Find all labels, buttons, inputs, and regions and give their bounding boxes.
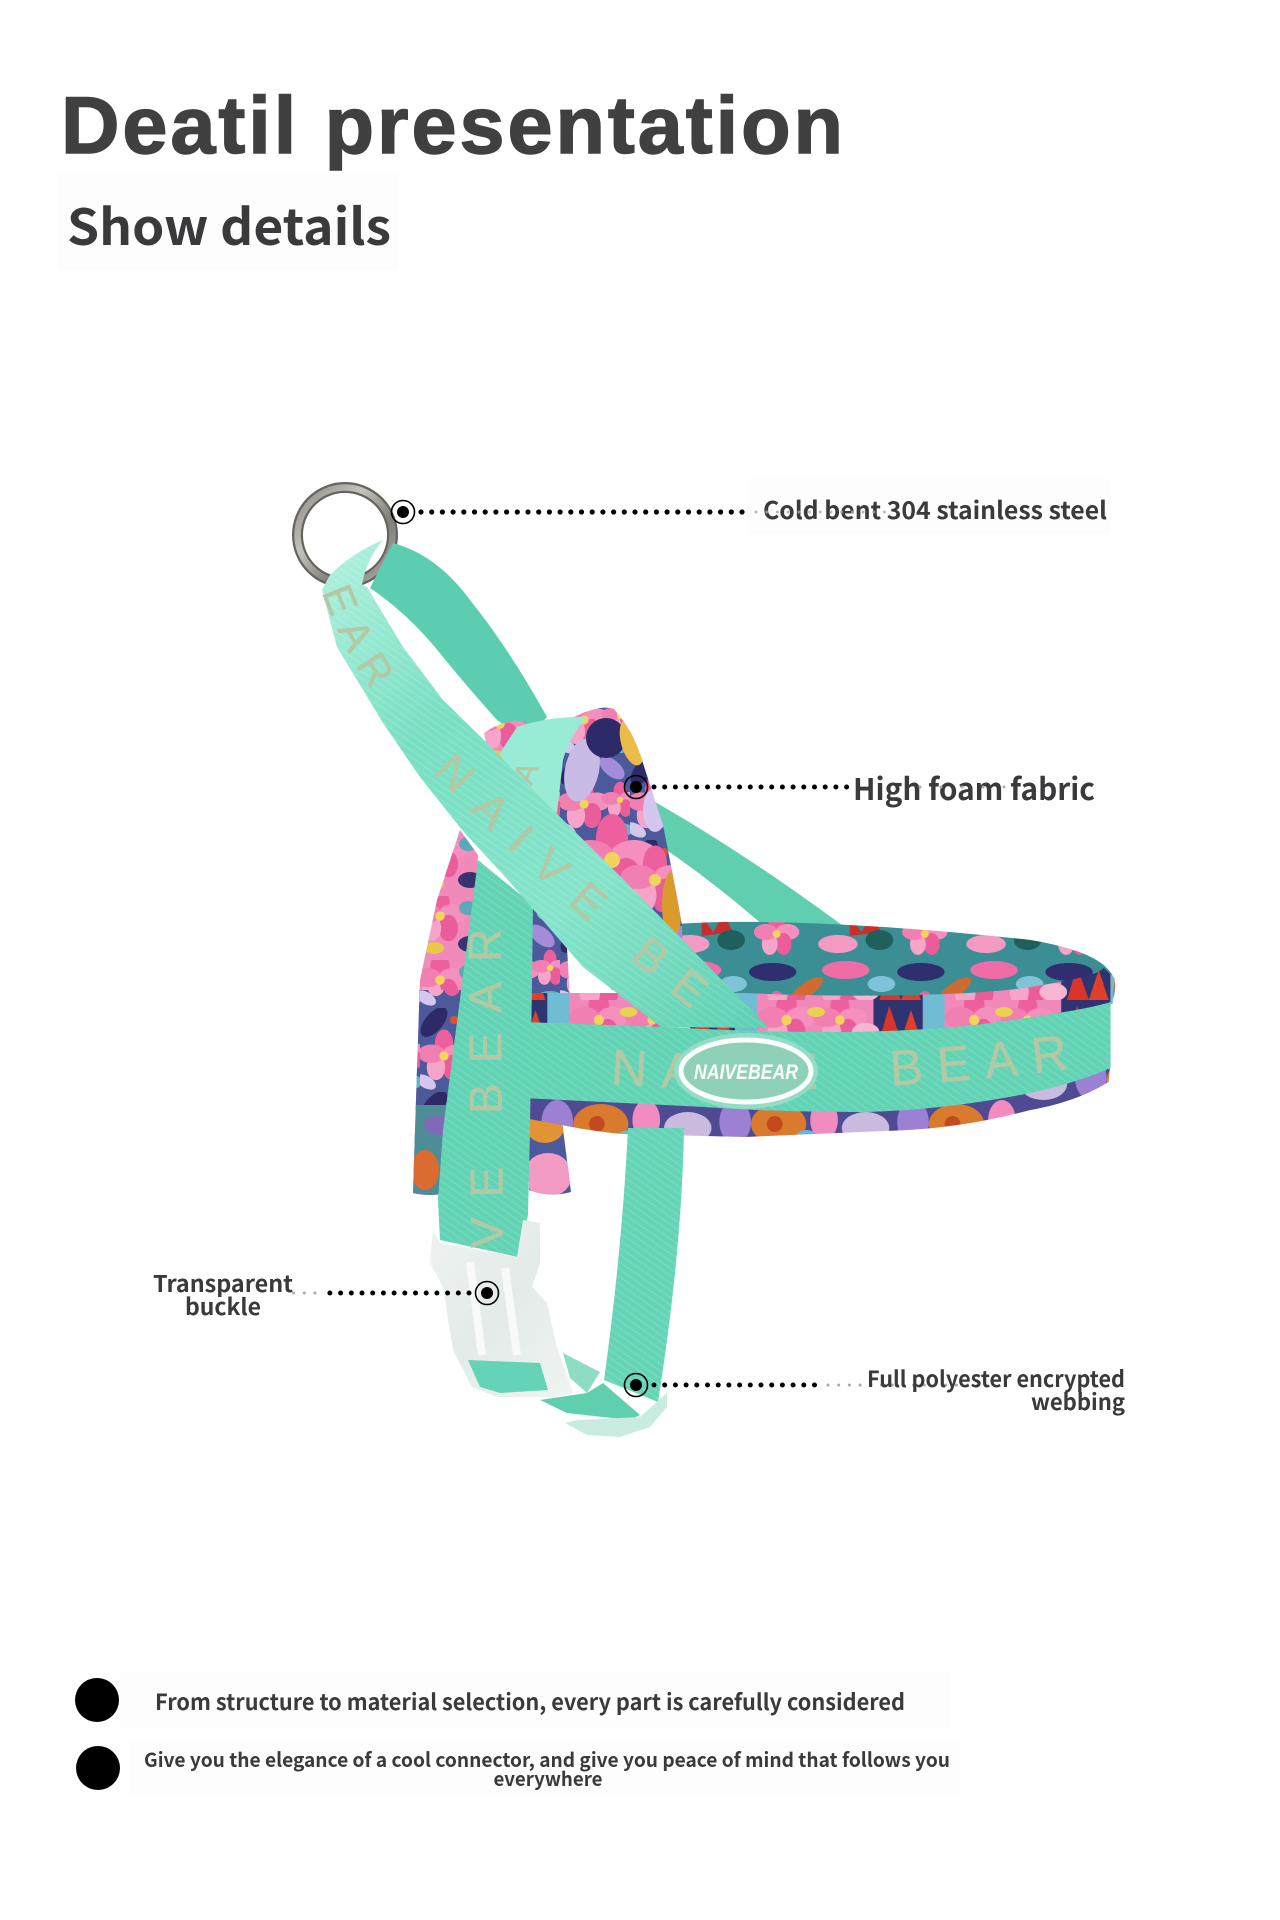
- logo badge: NAIVEBEAR: [694, 1061, 799, 1084]
- collar floral rim: [525, 968, 1115, 1036]
- callout: high foam fabric: [624, 765, 1095, 809]
- clear plastic buckle: [430, 1220, 667, 1437]
- woven brand text on collar: NAIVE BEAR: [614, 1036, 1068, 1089]
- long webbing from ring to collar: NAIVE BE: [434, 752, 710, 1009]
- bullet point 2: Give you the elegance of a cool connector, and give you peace of mind that follows you: [144, 1744, 950, 1773]
- callout: polyester webbing: [624, 1362, 1126, 1417]
- long webbing from ring to collar: [322, 540, 769, 1028]
- tri-glide slider: [565, 1393, 667, 1437]
- buckle connector: [563, 1353, 600, 1393]
- subtitle: Show details: [67, 188, 391, 260]
- neck webbing: IA: [515, 766, 540, 786]
- bullet point 2: [76, 1744, 950, 1792]
- logo badge: [674, 1033, 818, 1109]
- rear strap: [370, 543, 842, 927]
- callout: polyester webbing: webbing: [1031, 1385, 1126, 1417]
- callout: high foam fabric: High foam fabric: [853, 765, 1095, 809]
- collar inner lining: [676, 922, 1115, 1010]
- long webbing from ring to collar: EAR: [322, 584, 391, 689]
- bullet point 1: [75, 1678, 905, 1722]
- callout: stainless steel ring: Cold bent 304 stainless steel: [763, 492, 1107, 527]
- buckle lower webbing: [468, 1360, 548, 1393]
- vertical chest webbing: VE BEAR: [468, 930, 504, 1248]
- callout: stainless steel ring: [392, 492, 1107, 527]
- vertical chest webbing: [438, 860, 533, 1257]
- lower belly strap: [604, 1128, 684, 1402]
- collar lower floral edge: [523, 1060, 1111, 1137]
- harness detail infographic: [66, 94, 1125, 1790]
- callout: transparent buckle: [153, 1265, 498, 1322]
- collar webbing band: [530, 1002, 1111, 1112]
- callout: transparent buckle: buckle: [185, 1288, 261, 1322]
- title: Deatil presentation: [61, 81, 843, 171]
- metal ring: [298, 488, 392, 582]
- bullet point 2: everywhere: [494, 1763, 602, 1792]
- neck webbing: [500, 716, 587, 813]
- product photo: harness: [292, 482, 1116, 1437]
- floral side pads: [405, 830, 572, 1200]
- floral neck pad: [484, 708, 690, 990]
- callout: polyester webbing: Full polyester encrypted: [867, 1362, 1125, 1394]
- bullet point 1: From structure to material selection, every part is carefully considered: [155, 1685, 905, 1717]
- callout: transparent buckle: Transparent: [153, 1265, 293, 1299]
